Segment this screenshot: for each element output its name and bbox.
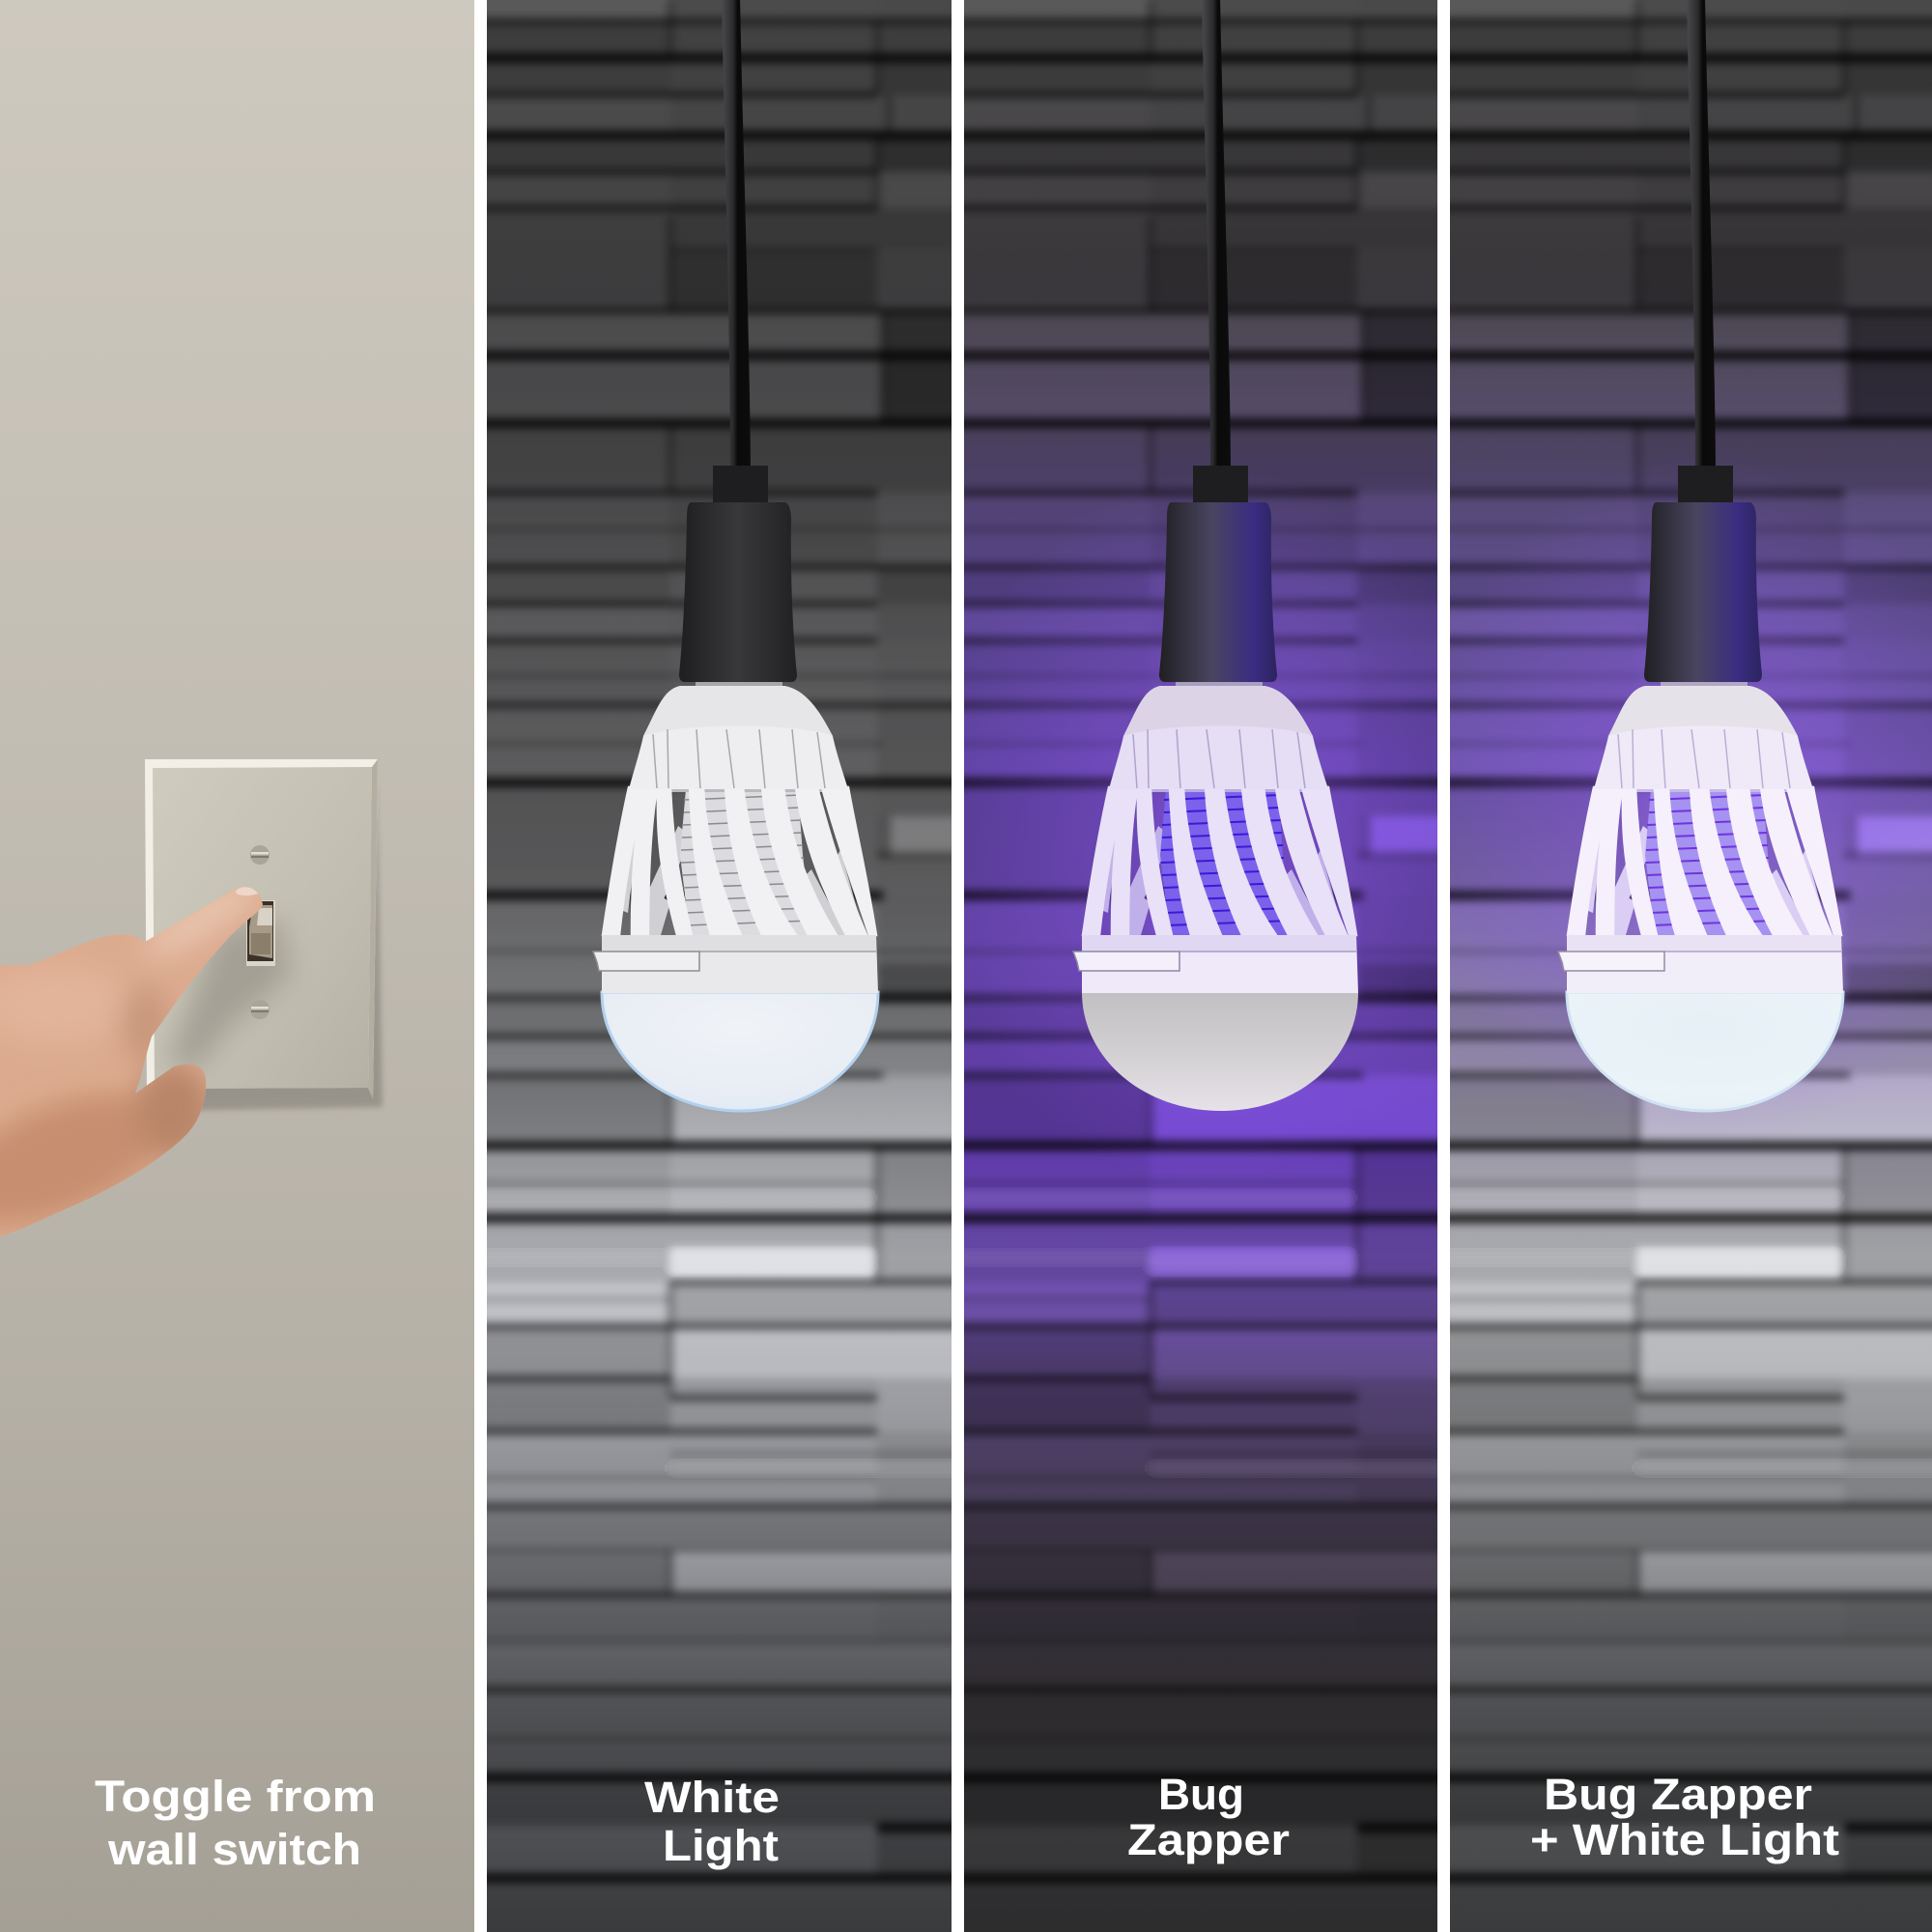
panel: bug zapper [964, 0, 1437, 1932]
caption: bug zapper plus white light: Bug Zapper [1544, 1770, 1812, 1819]
wall background [0, 0, 474, 1932]
caption: toggle from wall switch: Toggle from [95, 1772, 376, 1821]
finger shadow on plate [169, 918, 290, 1072]
caption: white light: Light [663, 1821, 779, 1870]
caption: bug zapper: Bug [1158, 1770, 1244, 1819]
icon: bottom screw [250, 1000, 270, 1019]
switch plate shadow [201, 811, 384, 1112]
caption: white light: White [644, 1773, 780, 1822]
brick wall background [487, 0, 952, 1932]
icon: top screw [250, 845, 270, 865]
mixed lit brick wall background [1415, 0, 1932, 1932]
icon: hanging bulb zapper and white light [1558, 0, 1843, 1111]
panel: wall switch photo [0, 0, 474, 1932]
icon: hanging bulb white light [593, 0, 878, 1111]
purple lit brick wall background [964, 0, 1437, 1932]
panel: white light [487, 0, 952, 1932]
caption: bug zapper: Zapper [1127, 1815, 1290, 1864]
icon: hand pressing switch [0, 887, 263, 1236]
icon: toggle [246, 900, 275, 966]
icon: switch plate [145, 759, 378, 1098]
caption: bug zapper plus white light: + White Light [1530, 1815, 1839, 1864]
panel: bug zapper plus white light [1415, 0, 1932, 1932]
icon: hanging bulb bug zapper [1073, 0, 1358, 1111]
caption: toggle from wall switch: wall switch [107, 1825, 361, 1874]
